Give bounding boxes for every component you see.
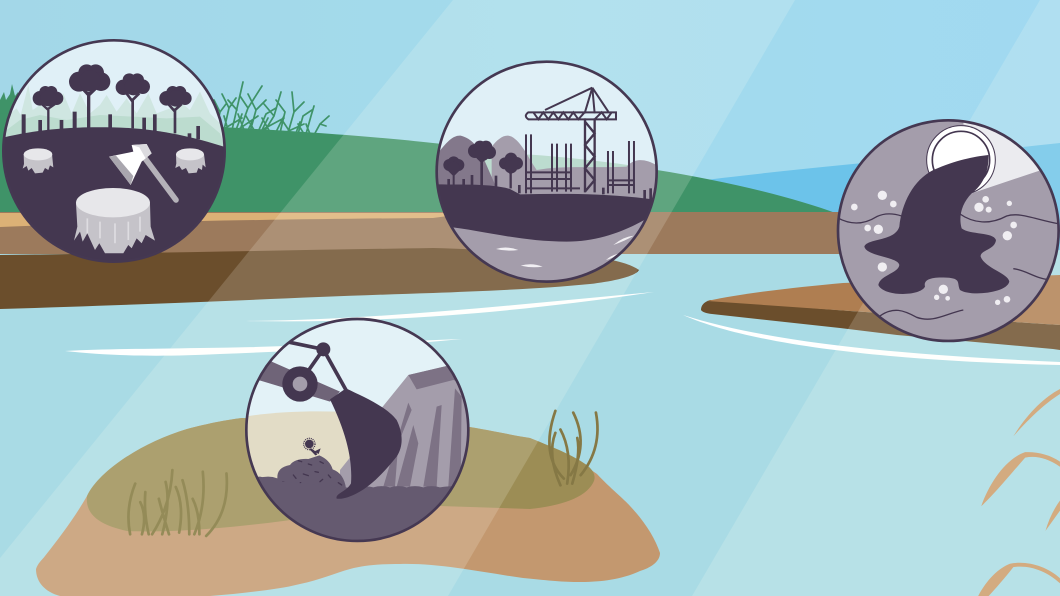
pivot wheel (282, 366, 318, 402)
grass left of first circle (0, 84, 20, 114)
water (454, 220, 644, 280)
standing trees (33, 64, 192, 133)
tree stumps row (22, 112, 200, 139)
scaffolding (526, 134, 634, 193)
axe (109, 144, 176, 200)
grass on hill (210, 82, 329, 135)
small stump left (23, 148, 53, 173)
rock face (340, 366, 467, 488)
ground (258, 476, 452, 540)
mountains (492, 136, 656, 199)
sand plain (248, 411, 350, 478)
flower on heap (304, 438, 321, 455)
circle icon: deforestation (0, 37, 230, 267)
small stump right (175, 148, 206, 173)
background forest (6, 86, 223, 142)
water highlights (496, 236, 634, 267)
large stump (74, 188, 155, 253)
excavator arm (260, 362, 340, 402)
linkage (287, 342, 346, 390)
dark ground (430, 184, 663, 242)
right island grass tuft (549, 411, 598, 485)
circle icon: excavation (245, 318, 470, 542)
bubbles (851, 191, 1017, 305)
polluted discharge (864, 155, 1009, 294)
distant blue water (690, 143, 1060, 260)
green hill (0, 113, 838, 214)
bucket (330, 388, 402, 499)
circle icon: construction (430, 55, 663, 288)
white water streaks (65, 292, 1060, 365)
right river bank (701, 275, 1060, 350)
sky (0, 0, 1060, 300)
circle icon: pollution outfall (837, 103, 1060, 341)
ripple lines (837, 214, 1060, 319)
spoil heap (258, 455, 346, 488)
island (36, 418, 660, 596)
pale green hill (484, 154, 628, 177)
dark ground (0, 127, 230, 267)
river water (0, 250, 1060, 596)
crane (526, 88, 616, 192)
trees (443, 141, 652, 200)
far river bank (0, 212, 842, 309)
left island grass tuft (128, 470, 227, 536)
pipe (963, 122, 1040, 194)
reeds (976, 389, 1060, 596)
